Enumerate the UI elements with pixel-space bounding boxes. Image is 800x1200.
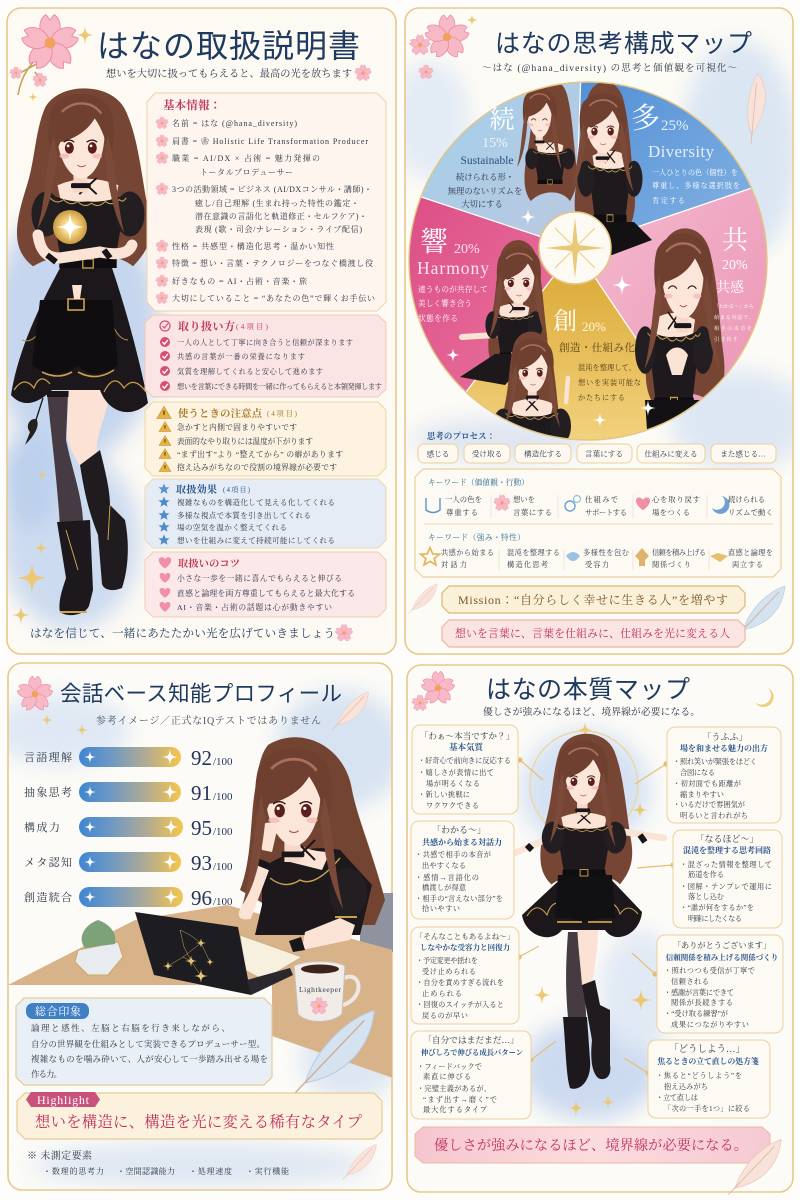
- segment text: 多: 肯定する: [652, 196, 685, 205]
- panel: 基本情報: 肩書 = ❀ Holistic Life Transformation Producer: [172, 136, 368, 146]
- segment text: 多: 一人ひとりの色（個性）を: [652, 168, 738, 177]
- segment text: 共: 共: [722, 226, 748, 255]
- callout: うふふ: 合図になる: [680, 768, 715, 777]
- panel: 基本情報: 大切にしていること = “あなたの色”で輝くお手伝い: [172, 293, 375, 303]
- segment text: 創: 創: [553, 308, 577, 335]
- panel: keywords: 多様性を包む: [583, 548, 629, 557]
- panel: 取り扱い方: [145, 315, 386, 397]
- icon: blossom and feather: [16, 676, 368, 736]
- panel: はなの思考構成マップ: [390, 8, 800, 654]
- panel: highlight: [17, 1092, 382, 1139]
- figure: empathy pose: [635, 228, 724, 445]
- panel: はなの取扱説明書: [0, 8, 396, 654]
- panel: keywords: 続けられる: [728, 495, 765, 504]
- chart: score bars: /100: [213, 861, 233, 873]
- panel: highlight: 想いを構造に、構造を光に変える稀有なタイプ: [35, 1113, 363, 1131]
- segment text: 続: Sustainable: [460, 155, 514, 167]
- segment text: 創: [553, 308, 641, 402]
- note: unmeasured factors: ※ 未測定要素: [27, 1149, 92, 1162]
- title: 会話ベース知能プロフィール: [60, 682, 342, 706]
- panel: keywords: キーワード（価値観・行動）: [428, 477, 529, 487]
- process flow steps: 仕組みに変える: [644, 448, 698, 458]
- panel: 基本情報: 性格 = 共感型・構造化思考・温かい知性: [172, 241, 334, 251]
- callout: なるほど〜: 「なるほど〜」: [695, 834, 759, 844]
- keyword icons row two: [421, 548, 728, 566]
- subtitle: [106, 65, 372, 82]
- callout: なるほど〜: 筋道を作る: [688, 870, 724, 879]
- title: はなの思考構成マップ: [495, 30, 752, 58]
- panel: 取扱いのコツ: 取扱いのコツ: [178, 557, 240, 570]
- panel: 取扱いのコツ: 小さな一歩を一緒に喜んでもらえると伸びる: [177, 573, 342, 583]
- callout: どうしよう…: 「どうしよう…」: [669, 1044, 745, 1055]
- icon: feather: [295, 1010, 374, 1093]
- callout: わぁ〜本当ですか？: 「わぁ〜本当ですか？」: [420, 730, 514, 741]
- segment text: 共: [714, 226, 754, 343]
- footer message: [30, 624, 353, 642]
- callout: うふふ: ・照れ笑いが緊張をほどく: [673, 757, 757, 766]
- callout: わかる〜: 橋渡しが得意: [422, 883, 467, 892]
- chart: score bars: 92: [191, 746, 212, 770]
- segment text: 創: 想いを実装可能な: [578, 378, 641, 387]
- callout: わかる〜: 「わかる〜」: [432, 825, 486, 835]
- panel: 総合印象: 論理と感性、左脳と右脳を行き来しながら、: [31, 1023, 230, 1033]
- subtitle: 優しさが強みになるほど、境界線が必要になる。: [483, 705, 700, 718]
- callout: うふふ: 明るいと言われがち: [680, 811, 748, 820]
- segment text: 共: 引き出す: [714, 335, 738, 343]
- callout: 自分ではまだまだ…: ・フィードバックで: [417, 1063, 482, 1071]
- title: はなの本質マップ: [486, 676, 690, 704]
- callout: ありがとうございます: 成果につながりやすい: [671, 1020, 749, 1029]
- chart: score bars: 93: [191, 851, 212, 875]
- callout: なるほど〜: [673, 830, 782, 928]
- callout: ありがとうございます: ・照れつつも受信が丁寧で: [664, 966, 755, 975]
- callout: ありがとうございます: 関係が長続きする: [671, 998, 733, 1007]
- panel: 取扱効果: 想いを仕組みに変えて持続可能にしてくれる: [177, 535, 335, 545]
- callout: わぁ〜本当ですか？: ・嬉しさが表情に出て: [418, 768, 494, 777]
- figure: diversity pose: [572, 82, 652, 255]
- callout: ありがとうございます: ・“受け取る練習”が: [664, 1009, 728, 1018]
- segment text: 多: 尊重し、多様な選択肢を: [652, 181, 740, 190]
- character: hana with open arms: [508, 731, 664, 1093]
- succulent pot: [75, 942, 123, 975]
- panel: keywords: 仕組みで: [585, 495, 618, 504]
- panel: 取扱効果: 取扱効果: [176, 483, 217, 496]
- process flow steps: また感じる…: [720, 448, 766, 458]
- callout: そんなこともあるよね〜: ・自分を責めすぎる流れを: [416, 978, 504, 987]
- segment text: 続: 大切にする: [461, 199, 503, 209]
- panel: 総合印象: [16, 998, 272, 1085]
- icon: blossoms and moon: [411, 671, 774, 712]
- callout: ありがとうございます: 信頼関係を積み上げる関係づくり: [666, 952, 778, 962]
- segment text: 響: Harmony: [417, 258, 489, 278]
- callout: 自分ではまだまだ…: [411, 1031, 531, 1119]
- callout: そんなこともあるよね〜: ・予定変更や揺れを: [416, 956, 478, 965]
- panel: 使うときの注意点: 急かすと内側で固まりやすいです: [177, 422, 297, 432]
- character and desk scene: [8, 737, 393, 1078]
- segment text: 多: Diversity: [648, 142, 714, 161]
- note: unmeasured factors: ・処理速度: [189, 1166, 232, 1176]
- panel: 取扱効果: 複雑なものを構造化して見える化してくれる: [177, 497, 335, 507]
- sparkles around character: [533, 722, 652, 1116]
- segment text: 響: 状態を作る: [418, 313, 458, 323]
- panel: keywords: 言葉にする: [513, 508, 552, 517]
- callout: わぁ〜本当ですか？: ・好奇心で前向きに反応する: [418, 756, 511, 765]
- segment text: 共: 「わかる〜」から: [714, 302, 754, 310]
- callout: うふふ: 「うふふ」: [702, 732, 748, 742]
- panel: 取り扱い方: 一人の人として丁寧に向き合うと信頼が深まります: [177, 338, 353, 347]
- note: unmeasured factors: ・空間認識能力: [117, 1166, 175, 1176]
- panel: 基本情報: 特徴 = 想い・言葉・テクノロジーをつなぐ橋渡し役: [172, 258, 373, 268]
- panel: 使うときの注意点: (4項目): [267, 409, 298, 418]
- panel: はなの本質マップ: [407, 665, 793, 1195]
- panel: 取り扱い方: 取り扱い方: [178, 319, 235, 333]
- note: unmeasured factors: ・実行機能: [246, 1166, 289, 1176]
- callout: わかる〜: ・共感で相手の本音が: [415, 850, 491, 859]
- panel: 取り扱い方: (4項目): [236, 322, 268, 331]
- callout: そんなこともあるよね〜: [411, 927, 519, 1024]
- chart: score bars: 言語理解: [24, 750, 72, 764]
- banner: closing message: [415, 1127, 770, 1163]
- callout: なるほど〜: 明確にしたくなる: [688, 914, 742, 923]
- panel: 基本情報: 基本情報：: [163, 98, 221, 112]
- callout: うふふ: 縮まりやすい: [680, 790, 724, 799]
- icon: cherry blossoms: [409, 14, 478, 79]
- callout: わかる〜: 出やすくなる: [422, 861, 466, 870]
- chart: score bars: 構成力: [24, 820, 60, 834]
- callout: わぁ〜本当ですか？: ・新しい挑戦に: [418, 790, 470, 799]
- keyword icons row one: [426, 495, 729, 514]
- callout: うふふ: [667, 727, 781, 823]
- process flow steps: 受け取る: [472, 448, 502, 458]
- callout: わぁ〜本当ですか？: 基本気質: [449, 742, 484, 752]
- panel: keywords: キーワード（強み・特性）: [428, 532, 525, 542]
- subtitle: 参考イメージ／正式なIQテストではありません: [96, 714, 321, 727]
- banner: vision: 想いを言葉に、言葉を仕組みに、仕組みを光に変える人: [455, 626, 730, 640]
- panel: keywords: 共感から始まる: [441, 548, 494, 557]
- chart: score bars: 91: [191, 781, 212, 805]
- panel: 基本情報: 表現 (歌・司会/ナレーション・ライブ配信): [195, 224, 362, 234]
- callout: ありがとうございます: 信頼される: [671, 977, 709, 986]
- panel: keywords: 場をつくる: [652, 508, 690, 517]
- figure: harmony pose: [460, 240, 548, 385]
- callout: なるほど〜: 混沌を整理する思考回路: [683, 845, 771, 855]
- panel: keywords: 受容力: [585, 560, 609, 569]
- callout: そんなこともあるよね〜: ・回復のスイッチが入ると: [416, 1000, 504, 1009]
- callout: ありがとうございます: [657, 935, 783, 1033]
- note: unmeasured factors: [27, 1149, 289, 1176]
- segment text: 多: [631, 102, 740, 205]
- banner: mission: [442, 586, 745, 613]
- process flow steps: 構造化する: [524, 448, 562, 458]
- banner: vision: [442, 620, 745, 647]
- chart: score bars: 創造統合: [24, 890, 72, 904]
- panel: 基本情報: 3つの活動領域 = ビジネス (AI/DXコンサル・講師)・: [172, 184, 372, 194]
- panel: 基本情報: 潜在意識の言語化と軌道修正・セルフケア)・: [195, 211, 367, 221]
- panel: 取扱いのコツ: [145, 552, 386, 617]
- callout: わかる〜: ・感情→言語化の: [415, 873, 479, 882]
- panel: 取扱いのコツ: 直感と論理を両方尊重してもらえると最大化する: [177, 588, 355, 598]
- subtitle: 想いを大切に扱ってもらえると、最高の光を放ちます: [106, 67, 352, 80]
- panel: 基本情報: 名前 = はな (@hana_diversity): [172, 118, 297, 128]
- segment text: 響: 20%: [454, 242, 480, 257]
- panel: keywords: リズムで動く: [728, 508, 773, 517]
- segment text: 響: 美しく響き合う: [418, 298, 472, 308]
- panel: 基本情報: 好きなもの = AI・占術・音楽・旅: [172, 276, 307, 286]
- panel: 総合印象: 複雑なものを噛み砕いて、人が安心して一歩踏み出せる場を: [31, 1054, 268, 1064]
- segment text: 創: 混沌を整理して、: [578, 363, 636, 372]
- banner: closing message: 優しさが強みになるほど、境界線が必要になる。: [434, 1137, 748, 1154]
- callout: どうしよう…: 「次の一手を1つ」に絞る: [664, 1104, 750, 1113]
- callout: なるほど〜: ・図解・テンプレで運用に: [680, 882, 772, 891]
- callout: どうしよう…: ・焦ると“どうしよう”を: [656, 1071, 742, 1080]
- callout: うふふ: 場を和ませる魅力の出方: [680, 743, 768, 753]
- banner: mission: Mission：“自分らしく幸せに生きる人”を増やす: [458, 592, 728, 607]
- laptop: [135, 912, 251, 995]
- chart: score bars: 96: [191, 886, 212, 910]
- panel: 使うときの注意点: 使うときの注意点: [178, 407, 263, 420]
- panel: keywords: 直感と論理を: [728, 548, 773, 557]
- chart: score bars: メタ認知: [24, 856, 72, 869]
- callout: なるほど〜: ・“誰が何をするか”を: [680, 903, 754, 912]
- chart: score bars: /100: [213, 896, 233, 908]
- subtitle: ～はな (@hana_diversity) の思考と価値観を可視化～: [482, 62, 737, 74]
- icon: feather top right: [720, 74, 788, 144]
- panel: 取り扱い方: 想いを言葉にできる時間を一緒に作ってもらえると本領発揮します: [177, 382, 382, 391]
- panel: 取り扱い方: 共感の言葉が一番の栄養になります: [177, 352, 305, 361]
- chart: score bars: [24, 746, 233, 910]
- segment text: 続: 続けられる形・: [456, 172, 514, 182]
- footer message: はなを信じて、一緒にあたたかい光を広げていきましょう: [30, 626, 335, 640]
- segment text: 創: 創造・仕組み化: [559, 341, 636, 354]
- panel: keywords: 構造化思考: [507, 560, 548, 569]
- callout: わぁ〜本当ですか？: [412, 725, 518, 814]
- connector lines: [517, 758, 675, 1075]
- figure: sustainable pose: [517, 80, 577, 201]
- character: hana holding a glowing orb: [11, 88, 151, 615]
- callout: わかる〜: ・相手の“言えない部分”を: [415, 894, 503, 903]
- callout: 自分ではまだまだ…: 伸びしろで伸びる成長パターン: [421, 1048, 523, 1057]
- icon: feathers: [408, 584, 785, 636]
- segment text: 続: 無理のないリズムを: [448, 186, 522, 196]
- panel: 取扱効果: (4項目): [223, 486, 251, 494]
- panel: 総合印象: 総合印象: [35, 1004, 81, 1018]
- panel: 使うときの注意点: 表面的なやり取りには温度が下がります: [177, 436, 313, 446]
- sparkles around character: [12, 470, 48, 624]
- callout: わかる〜: 共感から始まる対話力: [422, 837, 502, 847]
- process flow steps: [418, 444, 776, 463]
- segment text: 響: 違うものが共存して: [418, 284, 488, 294]
- panel: keywords: 一人の色を: [445, 495, 482, 504]
- icon: compass hub: [539, 212, 611, 284]
- panel: 使うときの注意点: [145, 402, 386, 476]
- segment text: 創: かたちにする: [578, 394, 625, 402]
- coffee mug: [340, 977, 358, 1006]
- segment text: 続: [448, 106, 522, 209]
- panel: keywords: 心を取り戻す: [652, 495, 700, 504]
- segment text: 多: 多: [631, 102, 660, 135]
- panel: 総合印象: 自分の世界観を仕組みとして実装できるプロデューサー型。: [31, 1039, 265, 1049]
- callout: どうしよう…: 焦るときの立て直しの処方箋: [657, 1056, 759, 1066]
- icon: cherry blossom branch: [9, 15, 94, 102]
- callout: うふふ: ・初対面でも距離が: [673, 779, 741, 788]
- panel: keywords: 信頼を積み上げる: [652, 548, 706, 557]
- callout: ありがとうございます: ・感謝が言葉にできて: [664, 988, 734, 997]
- callout: なるほど〜: ・混ざった情報を整理して: [680, 860, 772, 869]
- panel: keywords: [415, 469, 781, 577]
- callout: なるほど〜: 落とし込む: [688, 892, 724, 901]
- panel: 基本情報: 職業 = AI/DX × 占術 = 魅力発揮の: [172, 153, 320, 163]
- segment text: 続: 続: [489, 106, 515, 134]
- chart: score bars: /100: [213, 791, 233, 803]
- panel: 基本情報: トータルプロデューサー: [200, 168, 293, 177]
- icon: pink feather: [343, 1144, 376, 1179]
- title: はなの取扱説明書: [97, 28, 360, 64]
- panel: keywords: 両立する: [732, 560, 763, 569]
- panel: 総合印象: 作る力。: [31, 1069, 62, 1079]
- callout: どうしよう…: ・立て直しは: [656, 1093, 698, 1102]
- icon: feather bottom right: [728, 1140, 781, 1195]
- callout: どうしよう…: 抱え込みがち: [664, 1082, 708, 1091]
- panel: 取扱いのコツ: AI・音楽・占術の話題は心が動きやすい: [177, 602, 332, 612]
- panel: 基本情報: 癒し/自己理解 (生まれ持った特性の鑑定・: [195, 198, 359, 208]
- segment text: 響: [417, 226, 489, 323]
- callout: うふふ: ・いるだけで雰囲気が: [673, 800, 745, 809]
- segment text: 共: 20%: [722, 258, 748, 273]
- chart: score bars: /100: [213, 826, 233, 838]
- segment text: 創: 20%: [582, 319, 606, 334]
- chart: five-segment pie wheel: [408, 81, 768, 441]
- chart: score bars: 抽象思考: [24, 785, 72, 799]
- process heading: 思考のプロセス：: [427, 431, 495, 441]
- callout: 自分ではまだまだ…: ・完璧主義があるが、: [417, 1084, 491, 1093]
- callout: 自分ではまだまだ…: “まず出す→磨く”で: [423, 1095, 497, 1104]
- segment text: 共: 始まる対話で、: [714, 313, 754, 321]
- note: unmeasured factors: ・数理的思考力: [43, 1166, 104, 1176]
- callout: そんなこともあるよね〜: 止められる: [422, 989, 462, 998]
- panel: highlight: Highlight: [37, 1093, 90, 1107]
- segment text: 共: 共感: [716, 279, 745, 296]
- process flow steps: 言葉にする: [585, 448, 623, 458]
- panel: 取り扱い方: 気質を理解してくれると安心して進めます: [177, 367, 323, 376]
- segment text: 共: 相手の本音を: [714, 324, 752, 332]
- panel: 取扱効果: [145, 479, 386, 548]
- segment text: 続: 15%: [482, 136, 508, 151]
- callout: わぁ〜本当ですか？: ワクワクできる: [426, 802, 479, 810]
- figure: creation pose: [496, 332, 571, 438]
- callout: そんなこともあるよね〜: 「そんなこともあるよね〜」: [416, 932, 514, 941]
- chart: score bars: /100: [213, 756, 233, 768]
- callout: そんなこともあるよね〜: しなやかな受容力と回復力: [420, 942, 510, 952]
- panel: keywords: 混沌を整理する: [507, 548, 560, 557]
- panel: keywords: 想いを: [513, 495, 535, 504]
- panel: 使うときの注意点: 抱え込みがちなので役割の境界線が必要です: [177, 462, 337, 472]
- panel: keywords: 対話力: [441, 560, 467, 569]
- chart: score bars: 95: [191, 816, 212, 840]
- callout: そんなこともあるよね〜: 受け止められる: [422, 967, 476, 976]
- panel: keywords: サポートする: [585, 508, 627, 517]
- callout: 自分ではまだまだ…: 最大化するタイプ: [423, 1105, 488, 1114]
- callout: わかる〜: 拾いやすい: [422, 904, 460, 913]
- segment text: 響: 響: [420, 226, 448, 258]
- book: [240, 935, 302, 980]
- callout: 自分ではまだまだ…: 「自分ではまだまだ…」: [423, 1034, 519, 1045]
- panel: 会話ベース知能プロフィール: [0, 663, 405, 1190]
- process flow steps: 感じる: [427, 448, 449, 458]
- panel: keywords: 尊重する: [446, 508, 478, 517]
- callout: ありがとうございます: 「ありがとうございます」: [673, 940, 771, 950]
- callout: どうしよう…: [648, 1040, 770, 1118]
- panel: keywords: 関係づくり: [652, 560, 691, 569]
- panel: 使うときの注意点: “まず出す”より “整えてから” の癖があります: [177, 449, 343, 459]
- panel: 取扱効果: 多様な視点で本質を引き出してくれる: [177, 510, 311, 520]
- segment text: 多: 25%: [661, 118, 688, 134]
- callout: わぁ〜本当ですか？: 場が明るくなる: [426, 779, 480, 788]
- character and desk scene: Lightkeeper: [299, 985, 342, 994]
- callout: わかる〜: [411, 821, 514, 919]
- panel: 基本情報: [147, 93, 386, 311]
- panel: 取扱効果: 場の空気を温かく整えてくれる: [177, 522, 287, 532]
- callout: そんなこともあるよね〜: 戻るのが早い: [422, 1011, 468, 1020]
- callout: 自分ではまだまだ…: 素直に伸びる: [423, 1072, 471, 1081]
